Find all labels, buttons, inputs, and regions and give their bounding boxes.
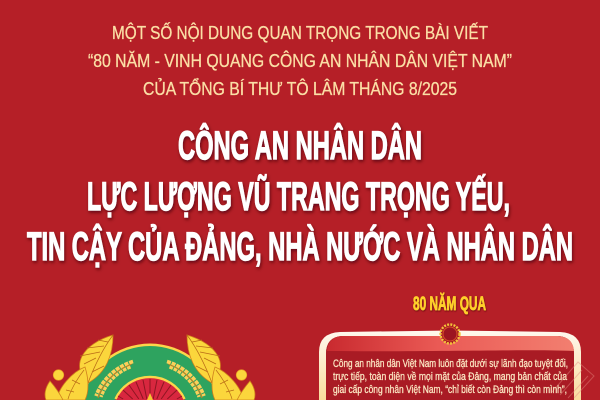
- panel: 80 years text: [319, 324, 594, 400]
- subtitle block: [88, 22, 512, 99]
- subtitle block: “80 NĂM - VINH QUANG CÔNG AN NHÂN DÂN VIỆT NAM”: [88, 50, 512, 71]
- panel body: [326, 336, 574, 400]
- main title: [27, 122, 573, 269]
- icon: police emblem: [45, 335, 255, 400]
- inner sun disc: [115, 377, 185, 400]
- panel body text: [333, 358, 568, 396]
- main title: CÔNG AN NHÂN DÂN: [178, 122, 422, 168]
- watermark: [552, 362, 594, 398]
- subtitle block: CỦA TỔNG BÍ THƯ TÔ LÂM THÁNG 8/2025: [143, 78, 457, 99]
- icon: star medallion: [440, 324, 460, 344]
- panel gloss band: [327, 336, 574, 351]
- subtitle block: MỘT SỐ NỘI DUNG QUAN TRỌNG TRONG BÀI VIẾT: [112, 22, 488, 43]
- panel frame: [319, 330, 581, 400]
- green ring: [83, 346, 217, 400]
- outer ring of emblem: [80, 344, 220, 400]
- heading: 80 năm qua: 80 NĂM QUA: [413, 293, 486, 315]
- laurel and wheat, right: [167, 335, 255, 400]
- laurel and wheat, left: [45, 335, 133, 400]
